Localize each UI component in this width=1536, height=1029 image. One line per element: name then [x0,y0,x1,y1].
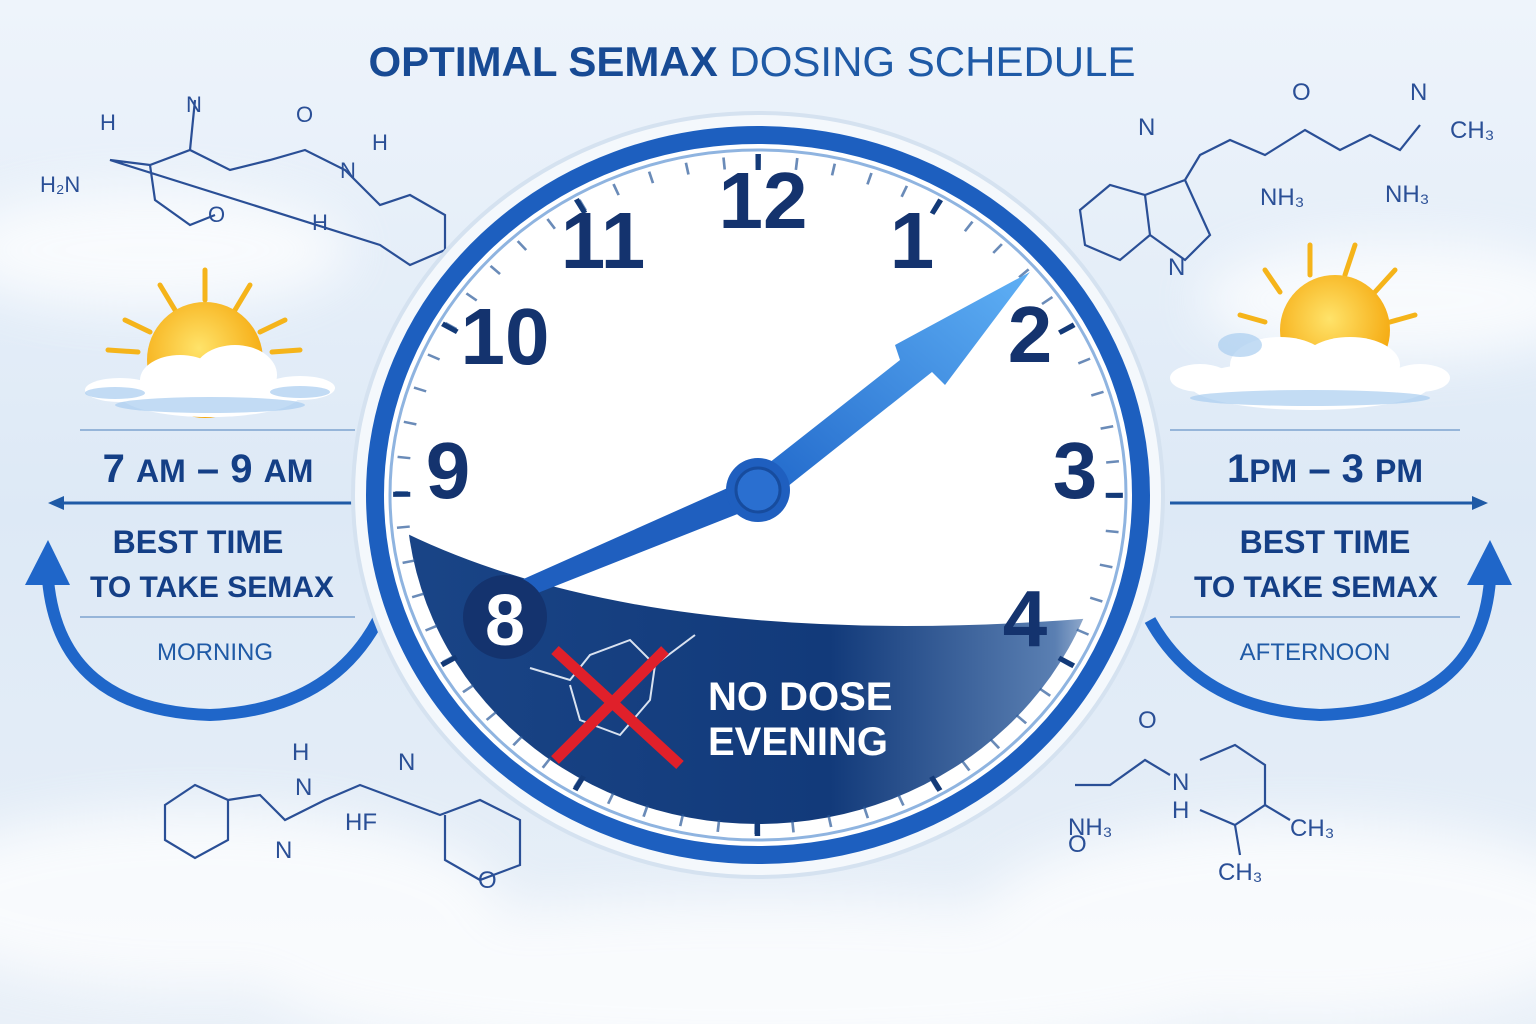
panel: morning: BEST TIME [113,524,283,560]
clock numbers: 1 [890,196,934,285]
molecule: bottom right: NH₃ [1068,814,1112,841]
clock numbers: 10 [461,292,549,381]
molecule: top right: CH₃ [1450,117,1494,144]
molecule: bottom left: H [292,739,309,766]
molecule: top left: O [208,202,225,227]
molecule: top left: H₂N [40,172,80,197]
hand: minute arrow [750,272,1030,502]
molecule: bottom right: CH₃ [1218,859,1262,886]
molecule: bottom right: N [1172,769,1189,796]
molecule: bottom left: N [398,749,415,776]
clock numbers: 11 [561,196,645,285]
molecule: bottom left: N [275,837,292,864]
molecule: top right: O [1292,79,1311,106]
clock numbers: 12 [719,156,807,245]
panel: morning: TO TAKE SEMAX [90,571,334,604]
panel: afternoon: 1PM – 3 PM [1227,447,1423,491]
evening shaded region [409,534,1084,824]
molecule: bottom right: CH₃ [1290,815,1334,842]
molecule: bottom left: HF [345,809,377,836]
molecule: bottom left: N [295,774,312,801]
clock numbers: 4 [1003,574,1048,663]
molecule: top right: N [1138,114,1155,141]
panel: morning: 7 AM – 9 AM [103,447,313,491]
center pin [726,458,790,522]
molecule: top right [1080,79,1494,281]
number 8 badge [463,575,547,661]
molecule: bottom left [165,739,520,894]
text: no dose evening: NO DOSE [708,675,892,719]
molecule: top right: NH₃ [1260,184,1304,211]
molecule: bottom right [1068,707,1334,886]
title: OPTIMAL SEMAX DOSING SCHEDULE [368,38,1136,85]
number 8 badge: 8 [485,581,525,661]
icon: afternoon sun [1170,245,1450,410]
molecule: top right: N [1168,254,1185,281]
molecule: top left [40,92,445,265]
icon: crossed molecule [530,635,695,765]
molecule: top right: NH₃ [1385,181,1429,208]
molecule: top left: N [340,158,356,183]
panel: afternoon: TO TAKE SEMAX [1194,571,1438,604]
molecule: top left: H [312,210,328,235]
molecule: top left: N [186,92,202,117]
clock numbers [426,156,1097,663]
hand: hour [510,478,768,600]
clock numbers: 2 [1008,290,1052,379]
molecule: top left: O [296,102,313,127]
panel: morning [25,430,378,715]
icon: morning sun [85,270,335,418]
panel: morning: MORNING [157,639,273,666]
panel: afternoon: AFTERNOON [1240,639,1390,666]
text: no dose evening [708,675,892,764]
panel: afternoon: BEST TIME [1240,524,1410,560]
clock numbers: 3 [1053,426,1097,515]
molecule: bottom left: O [478,867,497,894]
molecule: top left: H [372,130,388,155]
panel: afternoon [1150,430,1512,715]
molecule: bottom right: O [1138,707,1157,734]
clock [353,113,1163,900]
clock numbers: 9 [426,426,470,515]
molecule: top left: H [100,110,116,135]
molecule: top right: N [1410,79,1427,106]
text: no dose evening: EVENING [708,720,888,764]
molecule: bottom right: O [1068,831,1087,858]
molecule: bottom right: H [1172,797,1189,824]
